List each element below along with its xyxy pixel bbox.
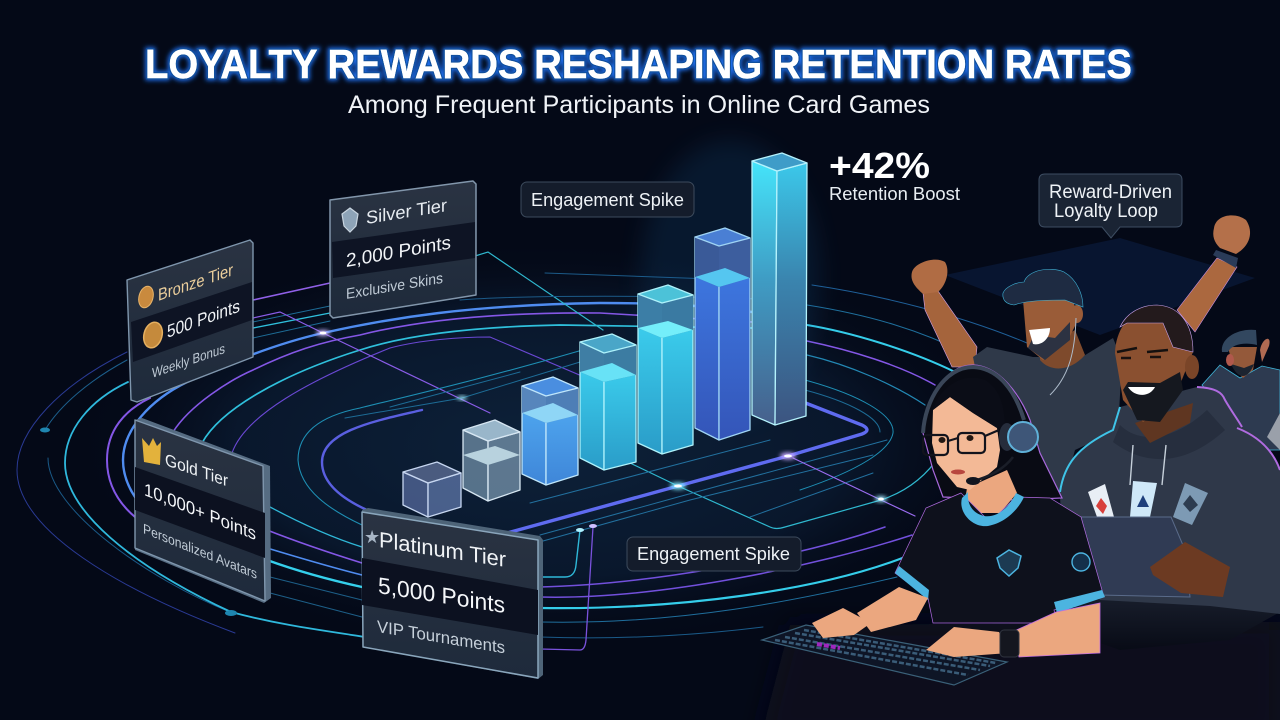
card right suit [1183,495,1198,512]
floor glow [70,240,1010,650]
left hand [812,608,871,638]
collar [961,492,1024,526]
neck [1040,330,1085,368]
mic tip [966,477,980,485]
eyebrows [1117,348,1168,352]
card right [1173,483,1208,525]
bar 7 [752,153,807,425]
face [932,397,1000,490]
bar 4 [580,334,636,470]
stat: retention boost [829,145,960,204]
card middle suit [1137,495,1149,507]
watch [1000,630,1019,657]
hood purple rim [1197,387,1280,470]
hair [1120,305,1193,352]
silver points: 2,000 Points [346,233,451,272]
label: engagement spike top: Engagement Spike [531,190,684,210]
right hand [926,627,1009,657]
right cuff [1054,590,1105,613]
neck [1135,403,1193,443]
left arm [857,587,928,632]
ear [1185,355,1199,379]
glow nodes [40,330,887,616]
logo [997,550,1021,576]
silver tier name: Silver Tier [366,195,447,228]
earbud cable [1050,318,1076,395]
earcup [1008,422,1038,452]
platinum perk: VIP Tournaments [377,617,505,657]
title: LOYALTY REWARDS RESHAPING RETENTION RATES [145,41,1132,87]
headband [923,367,1024,433]
chart glow [640,140,820,420]
eyes [938,435,974,443]
card left [1088,484,1114,517]
fist right [1213,215,1250,254]
stat: retention boost: +42% [829,145,930,186]
fringe [933,378,1005,432]
hair back [923,365,1062,500]
shirt [973,338,1122,498]
mic [973,457,1013,481]
label: engagement spike bottom: Engagement Spike [637,544,790,564]
mouth [1029,328,1050,344]
card: gold tier [135,418,271,603]
callout: reward-driven loyalty loop: Loyalty Loop [1054,201,1158,222]
fist left [911,260,947,294]
keyboard [762,625,1007,685]
bar 2 [463,420,520,501]
neck [963,470,1017,513]
silver perk: Exclusive Skins [346,270,443,303]
orbit rings and circuit lines [17,252,1027,650]
title: LOYALTY REWARDS RESHAPING RETENTION RATES [145,41,1132,87]
gold tier name: Gold Tier [165,449,228,491]
lips [951,470,965,474]
platinum points: 5,000 Points [378,572,505,618]
ear cushion [999,423,1015,451]
wristband [1213,250,1238,268]
callout: reward-driven loyalty loop [1039,174,1182,238]
bar 5 [638,285,693,454]
arm right [1177,258,1237,332]
subtitle: Among Frequent Participants in Online Card Games [348,91,930,119]
left cuff [895,566,929,600]
face [1115,305,1193,422]
hoodie [1060,387,1280,614]
smile [1128,387,1155,395]
ear and earbud [1071,305,1083,323]
shirt [895,493,1104,623]
gold perk: Personalized Avatars [143,521,257,583]
callout: reward-driven loyalty loop: Reward-Driven [1049,182,1172,203]
title: LOYALTY REWARDS RESHAPING RETENTION RATES [145,41,1132,87]
table surface [760,622,1280,720]
lower torso [1062,590,1280,650]
tablet [1081,517,1190,597]
beard [1123,372,1183,422]
icon: bronze coin [141,320,165,350]
keys [775,630,996,675]
label: engagement spike bottom [627,537,801,571]
bronze points: 500 Points [167,295,240,342]
gold points: 10,000+ Points [144,479,256,544]
card: silver tier [330,181,476,318]
stat: retention boost: Retention Boost [829,184,960,204]
3D bar chart [403,153,807,517]
hand [1150,542,1230,597]
sleeve logo [1072,553,1090,571]
eyes [1121,357,1161,358]
face [1023,300,1078,360]
person: man with tablet [1060,305,1280,650]
person: cheering man in cap [911,215,1250,498]
label: engagement spike top [521,182,694,217]
glasses [923,430,999,455]
hood inner [1113,410,1225,459]
person: background man [1202,330,1280,450]
icon: silver shield [342,208,358,232]
card middle [1130,481,1157,517]
glowing keys [817,644,840,648]
icon: bronze medal [136,285,156,309]
bronze tier name: Bronze Tier [158,260,233,305]
beard [1028,322,1070,360]
drawstrings [1130,445,1166,485]
right arm [1012,603,1100,657]
cap [1003,269,1083,307]
person: woman gamer at keyboard [762,365,1105,685]
card: bronze tier [127,240,253,402]
platinum tier name: Platinum Tier [379,527,506,572]
hoodie cyan rim [1060,407,1120,492]
bar 6 [695,228,750,440]
floor shadow behind people [945,238,1255,335]
card left suit [1096,498,1107,514]
bronze perk: Weekly Bonus [152,341,225,382]
card: platinum tier [362,508,543,679]
bar 3 [522,377,578,485]
arm left [923,291,977,367]
icon: gold crown [142,438,161,465]
bar 1 [403,462,461,517]
icon: platinum star: ★ [364,527,380,547]
